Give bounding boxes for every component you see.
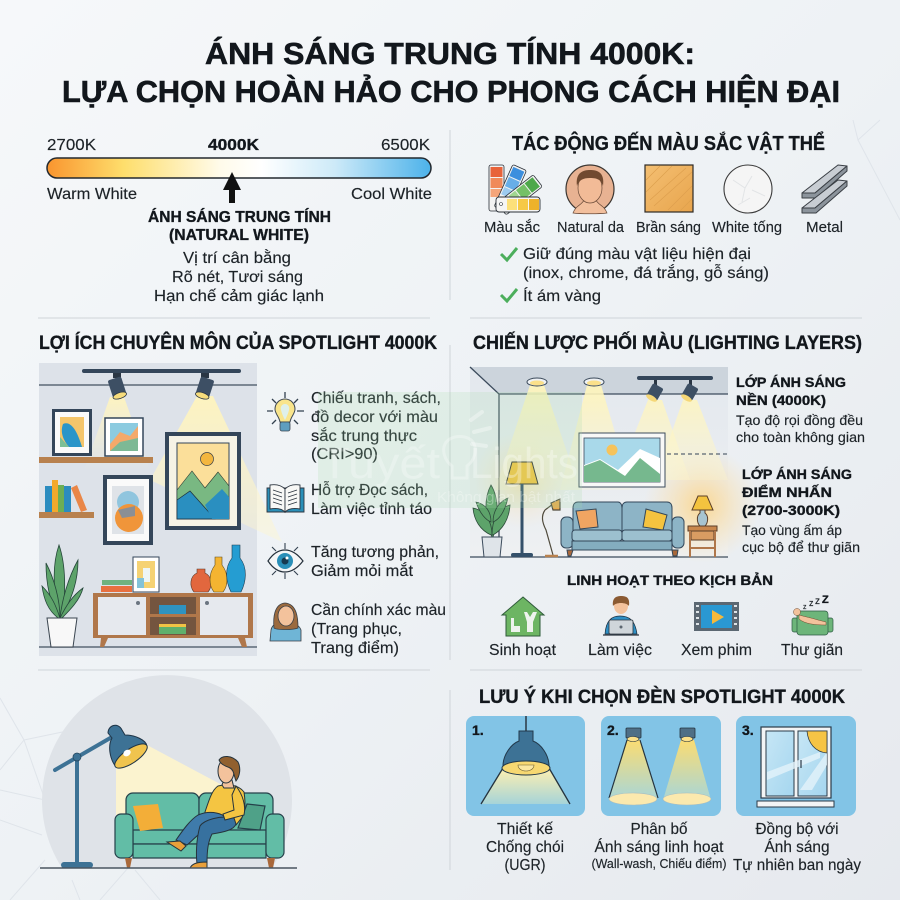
caption 3: Tự nhiên ban ngày — [733, 857, 861, 874]
illustration: man reading on sofa under lamp — [40, 675, 297, 868]
benefit text: accuracy: Trang điểm) — [311, 639, 399, 657]
scale labels — [47, 137, 430, 154]
scale labels: 4000K — [208, 137, 259, 154]
scenario labels: Làm việc — [588, 642, 652, 659]
heading: spotlight benefits: LỢI ÍCH CHUYÊN MÔN CỦA SPOTLIGHT 4000K — [39, 332, 437, 354]
caption 3: Ánh sáng — [764, 837, 830, 856]
wall frames — [52, 409, 241, 545]
gradient bar — [47, 158, 431, 178]
benefit text: reading: Làm việc tỉnh táo — [311, 501, 432, 518]
accent layer note: (2700-3000K) — [742, 502, 840, 518]
icon: house — [502, 597, 544, 636]
natural white description: Hạn chế cảm giác lạnh — [154, 288, 324, 305]
ambient layer note: NỀN (4000K) — [736, 392, 826, 408]
caption 3: Đồng bộ với — [756, 821, 838, 838]
benefit text: reading — [311, 480, 432, 518]
accent layer note: ĐIỂM NHẤN — [742, 483, 832, 500]
icon: relaxing on sofa: z — [809, 598, 814, 608]
accent layer note: Tạo vùng ấm áp — [742, 522, 842, 538]
icon: open book — [267, 485, 304, 512]
icon: woman — [270, 603, 301, 641]
natural white description: Rõ nét, Tươi sáng — [172, 269, 303, 286]
icon labels: Màu sắc — [484, 219, 540, 236]
icon: white marble — [724, 165, 772, 213]
illustration: gallery wall with track lights — [39, 363, 282, 656]
icon: light bulb — [267, 392, 304, 431]
scenario labels: Sinh hoạt — [489, 642, 557, 659]
icon labels: White tống — [712, 220, 782, 236]
accent layer note — [742, 465, 860, 555]
caption 2: (Wall-wash, Chiếu điểm) — [592, 857, 726, 871]
icon: metal bars — [802, 165, 847, 213]
warm glows — [474, 432, 760, 563]
watermark: Không gian bật nhất — [437, 489, 576, 506]
plant in white pot — [42, 545, 83, 647]
sideboard with decor — [93, 545, 253, 647]
warm and cool labels: Cool White — [351, 186, 432, 203]
benefit text: accuracy: Cần chính xác màu — [311, 602, 446, 619]
heading: LINH HOẠT THEO KỊCH BẢN — [567, 572, 773, 588]
panel: flexible scenarios — [489, 572, 843, 659]
caption 1: (UGR) — [504, 857, 546, 874]
icon labels: Brần sáng — [636, 220, 701, 236]
downlights and track — [527, 376, 713, 403]
arrow: 4000K marker — [223, 172, 241, 203]
ambient layer note: LỚP ÁNH SÁNG — [736, 373, 846, 390]
beams — [150, 396, 282, 542]
icon labels: Natural da — [557, 220, 625, 236]
framed landscape — [579, 433, 665, 487]
natural white description — [148, 207, 331, 305]
illustration: layered living room — [470, 367, 760, 563]
heading: LƯU Ý KHI CHỌN ĐÈN SPOTLIGHT 4000K — [479, 686, 845, 708]
icon: relaxing on sofa: Z — [822, 594, 829, 606]
benefit list — [267, 390, 446, 657]
icon: light wood — [645, 165, 693, 212]
benefit text: artwork: Chiếu tranh, sách, — [311, 390, 441, 407]
caption 1: Chống chói — [486, 839, 564, 856]
benefit text: accuracy — [311, 602, 446, 657]
potted plant — [473, 485, 510, 557]
check list: Giữ đúng màu vật liệu hiện đại — [523, 246, 751, 263]
accent layer note: LỚP ÁNH SÁNG — [742, 465, 852, 482]
track with spotlights — [82, 369, 241, 401]
benefit text: reading: Hỗ trợ Đọc sách, — [311, 480, 428, 499]
bedside table with lamp — [688, 496, 717, 557]
watermark: Lights — [470, 439, 578, 488]
card 1: anti-glare — [466, 716, 585, 816]
title: ÁNH SÁNG TRUNG TÍNH 4000K: — [205, 36, 695, 71]
watermark: Tuyết — [320, 439, 440, 488]
icon: color palette — [489, 164, 542, 215]
ambient layer note: Tạo độ rọi đồng đều — [736, 412, 863, 428]
caption 2: Phân bố — [630, 821, 688, 838]
card 1: anti-glare: 1. — [472, 722, 484, 738]
icon labels — [484, 219, 843, 236]
scenario labels: Thư giãn — [781, 642, 843, 659]
card 3: natural light: 3. — [742, 722, 754, 738]
scenario labels: Xem phim — [681, 642, 752, 659]
floor lamp — [55, 725, 151, 868]
floor lamp — [506, 462, 538, 557]
accent layer note: cục bộ để thư giãn — [742, 539, 860, 555]
panel: color temperature scale — [47, 137, 432, 305]
benefit text: contrast — [311, 544, 439, 580]
lighting layer notes — [736, 373, 865, 555]
caption 3 — [733, 821, 861, 874]
scale labels: 6500K — [381, 137, 430, 154]
title — [62, 36, 840, 109]
icon: relaxing on sofa: z — [803, 604, 807, 611]
panel: impact on object color — [484, 131, 847, 305]
warm and cool labels — [47, 186, 432, 203]
reading lamp — [542, 499, 560, 556]
icon: relaxing on sofa: z — [815, 596, 820, 607]
check list: Ít ám vàng — [523, 286, 601, 305]
caption 2: Ánh sáng linh hoạt — [594, 837, 724, 856]
natural white description: (NATURAL WHITE) — [169, 227, 309, 244]
ceiling beams — [495, 385, 728, 490]
scale labels: 2700K — [47, 137, 96, 154]
watermark — [318, 392, 582, 508]
heading: color strategy: CHIẾN LƯỢC PHỐI MÀU (LIGHTING LAYERS) — [473, 332, 862, 354]
benefit text: artwork: sắc trung thực — [311, 426, 417, 445]
heading: TÁC ĐỘNG ĐẾN MÀU SẮC VẬT THỂ — [512, 131, 825, 155]
person — [167, 756, 245, 868]
check list — [501, 246, 769, 305]
caption 2 — [592, 821, 726, 871]
ambient layer note: cho toàn không gian — [736, 429, 865, 445]
caption 1: Thiết kế — [497, 821, 553, 838]
benefit text: artwork: (CRI>90) — [311, 446, 378, 463]
ambient layer note — [736, 373, 865, 445]
icon: eye — [268, 543, 303, 579]
natural white description: Vị trí cân bằng — [183, 248, 291, 267]
icon: natural skin face — [566, 165, 614, 214]
benefit text: contrast: Tăng tương phản, — [311, 544, 439, 561]
sofa — [115, 793, 284, 868]
benefit text: accuracy: (Trang phục, — [311, 621, 402, 638]
panel: spotlight selection notes — [466, 686, 861, 874]
title: LỰA CHỌN HOÀN HẢO CHO PHONG CÁCH HIỆN ĐẠI — [62, 73, 840, 109]
sofa — [561, 502, 684, 556]
benefit text: contrast: Giảm mỏi mắt — [311, 561, 414, 580]
icon: person at laptop — [603, 596, 639, 635]
card 2: light distribution — [601, 716, 721, 816]
icon: relaxing on sofa — [792, 594, 833, 635]
card 2: light distribution: 2. — [607, 722, 619, 738]
light beam — [116, 745, 222, 815]
scenario labels — [489, 642, 843, 659]
warm and cool labels: Warm White — [47, 186, 137, 203]
shelves with books — [39, 457, 153, 518]
icon: film — [694, 602, 739, 631]
benefit text: artwork: đồ decor với màu — [311, 409, 438, 426]
natural white description: ÁNH SÁNG TRUNG TÍNH — [148, 207, 331, 226]
card 3: natural light — [736, 716, 856, 816]
icon labels: Metal — [806, 220, 843, 236]
caption 1 — [486, 821, 564, 874]
check list: (inox, chrome, đá trắng, gỗ sáng) — [523, 263, 769, 282]
benefit text: artwork — [311, 390, 441, 463]
